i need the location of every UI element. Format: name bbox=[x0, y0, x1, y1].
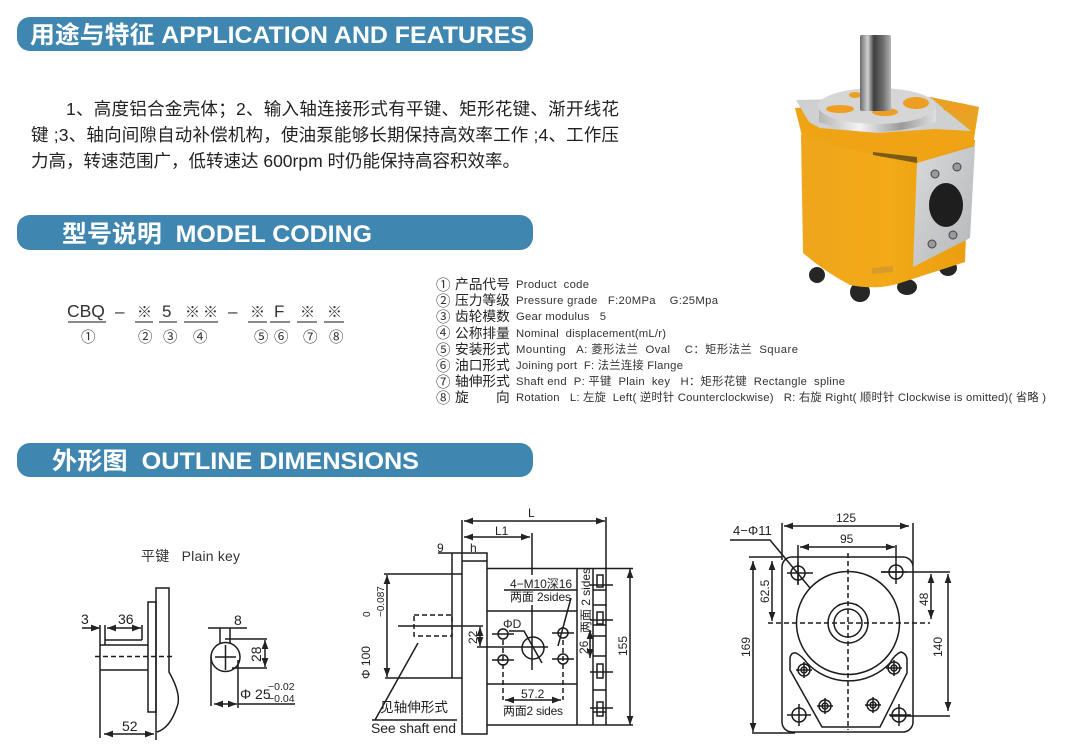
legend: model code explanation: ⑥ bbox=[436, 358, 450, 375]
diagram: shaft cross section: 28 bbox=[248, 646, 264, 662]
diagram: shaft cross section: −0.04 bbox=[268, 693, 295, 705]
diagram: side view: 26 bbox=[577, 640, 591, 654]
model code diagram: ⑦ bbox=[303, 329, 318, 346]
model code diagram: ※ bbox=[203, 304, 218, 321]
pump side panel bbox=[913, 146, 975, 267]
diagram: front view: 48 bbox=[917, 592, 931, 606]
legend: model code explanation: 产品代号 bbox=[455, 277, 510, 292]
diagram: side view: 57.2 bbox=[521, 687, 545, 701]
legend: model code explanation: Product code bbox=[516, 279, 589, 291]
legend: model code explanation: 压力等级 bbox=[455, 292, 510, 308]
diagram: shaft cross section: Φ 25 bbox=[240, 686, 271, 702]
legend: model code explanation: ③ bbox=[436, 309, 450, 326]
diagram: side view: h bbox=[470, 541, 477, 555]
diagram: side view: −0.087 bbox=[376, 586, 387, 617]
diagram: shaft cross section bbox=[208, 612, 295, 708]
legend: model code explanation: Gear modulus 5 bbox=[516, 311, 606, 323]
diagram: side view: L bbox=[528, 506, 535, 520]
legend: model code explanation: Nominal displacement(mL/r) bbox=[516, 328, 666, 340]
model code diagram: ④ bbox=[193, 329, 208, 346]
legend: model code explanation bbox=[436, 277, 1046, 407]
diagram: side view: Φ 100 bbox=[359, 646, 373, 679]
model code diagram: – bbox=[228, 302, 238, 321]
model code diagram: ※ bbox=[250, 304, 265, 321]
diagram: side view: 两面 2 sides bbox=[579, 568, 593, 633]
legend: model code explanation: 公称排量 bbox=[455, 326, 510, 341]
banner: outline dimensions bbox=[17, 443, 533, 477]
pump screws bbox=[928, 163, 961, 248]
pump flange ring bbox=[819, 106, 936, 132]
diagram: side view: L1 bbox=[495, 524, 509, 538]
diagram: side view: 9 bbox=[437, 541, 444, 555]
diagram: shaft cross section: 8 bbox=[234, 612, 242, 628]
diagram: front view: 125 bbox=[836, 511, 856, 525]
diagram: side view: 22 bbox=[466, 630, 480, 644]
diagram: plain key shaft end bbox=[81, 548, 240, 740]
label: plain key: 平键 Plain key bbox=[141, 548, 240, 564]
legend: model code explanation: ① bbox=[436, 277, 450, 294]
legend: model code explanation: 旋 bbox=[455, 390, 469, 405]
model code diagram: ⑧ bbox=[329, 329, 344, 346]
legend: model code explanation: ④ bbox=[436, 325, 450, 342]
diagram: side view: 见轴伸形式 bbox=[380, 700, 448, 715]
model code diagram: ※ bbox=[137, 304, 152, 321]
model code diagram bbox=[67, 301, 344, 346]
pump port bbox=[929, 183, 963, 227]
model code diagram: F bbox=[274, 302, 284, 321]
diagram: front view: 4−Φ11 bbox=[733, 523, 772, 538]
legend: model code explanation: 向 bbox=[496, 390, 510, 405]
legend: model code explanation: 安装形式 bbox=[455, 342, 510, 357]
diagram: side view: ΦD bbox=[503, 617, 522, 631]
model code diagram: ① bbox=[81, 329, 96, 346]
model code diagram: ※ bbox=[327, 304, 342, 321]
pump top right corner bbox=[930, 97, 979, 131]
banner: model coding: 型号说明 MODEL CODING bbox=[62, 221, 372, 248]
legend: model code explanation: 齿轮模数 bbox=[455, 309, 510, 324]
pump top oil ports bbox=[826, 92, 971, 116]
banner: application and features: 用途与特征 APPLICATION AND FEATURES bbox=[30, 21, 527, 49]
legend: model code explanation: Pressure grade F:20MPa G:25Mpa bbox=[516, 295, 719, 307]
diagram: shaft cross section: −0.02 bbox=[268, 681, 295, 693]
legend: model code explanation: ⑦ bbox=[436, 374, 450, 391]
text block: features description: 键 ;3、轴向间隙自动补偿机构，使油泵能够长期保持高效率工作 ;4、工作压 bbox=[31, 125, 619, 145]
pump seam highlight bbox=[872, 266, 893, 274]
legend: model code explanation: ⑤ bbox=[436, 342, 450, 359]
legend: model code explanation: 轴伸形式 bbox=[455, 374, 510, 389]
diagram: plain key shaft end: 36 bbox=[118, 611, 134, 627]
pump shaft bbox=[860, 35, 891, 111]
pump body shadow line bbox=[873, 152, 917, 163]
legend: model code explanation: Shaft end P: 平键 Plain key H：矩形花键 Rectangle spline bbox=[516, 374, 845, 388]
pump feet bbox=[809, 260, 957, 302]
model code diagram: ③ bbox=[163, 329, 178, 346]
model code diagram: ② bbox=[138, 329, 152, 346]
photo: yellow gear pump bbox=[795, 35, 979, 302]
diagram: front view: 140 bbox=[931, 637, 945, 657]
legend: model code explanation: ② bbox=[436, 293, 450, 310]
diagram: side view bbox=[359, 506, 633, 736]
text block: features description: 1、高度铝合金壳体；2、输入轴连接形式有平键、矩形花键、渐开线花 bbox=[66, 99, 619, 119]
diagram: side view: 155 bbox=[616, 636, 630, 656]
pump body bbox=[801, 135, 975, 287]
model code diagram: ⑥ bbox=[274, 329, 288, 346]
legend: model code explanation: 油口形式 bbox=[455, 358, 510, 373]
model code diagram: ※ bbox=[300, 304, 315, 321]
diagram: plain key shaft end: 3 bbox=[81, 611, 89, 627]
legend: model code explanation: Joining port F: 法兰连接 Flange bbox=[516, 358, 683, 372]
model code diagram: ⑤ bbox=[254, 329, 268, 346]
diagram: front view: 95 bbox=[840, 532, 854, 546]
legend: model code explanation: ⑧ bbox=[436, 390, 450, 407]
pump rim bbox=[795, 97, 979, 160]
legend: model code explanation: Rotation L: 左旋 Left( 逆时针 Counterclockwise) R: 右旋 Right( 顺时针 Clockwise is omitted)( 省略 ) bbox=[516, 390, 1046, 404]
diagram: front view: 169 bbox=[739, 637, 753, 657]
model code diagram: ※ bbox=[185, 304, 200, 321]
model code diagram: CBQ bbox=[67, 301, 105, 321]
text block: features description: 力高，转速范围广，低转速达 600rpm 时仍能保持高容积效率。 bbox=[31, 151, 520, 171]
model code diagram: – bbox=[115, 302, 125, 321]
banner: outline dimensions: 外形图 OUTLINE DIMENSIONS bbox=[52, 448, 419, 475]
diagram: side view: 0 bbox=[362, 611, 373, 617]
diagram: side view: 4−M10深16 bbox=[510, 577, 572, 591]
banner: model coding bbox=[17, 215, 533, 250]
diagram: side view: 两面 2sides bbox=[510, 590, 571, 604]
diagram: side view: 两面2 sides bbox=[503, 704, 563, 718]
diagram: front view bbox=[730, 511, 950, 733]
pump top plate bbox=[796, 97, 971, 133]
diagram: plain key shaft end: 52 bbox=[122, 718, 138, 734]
diagram: front view: 62.5 bbox=[758, 579, 772, 603]
diagram: side view: See shaft end bbox=[371, 720, 456, 736]
model code diagram: 5 bbox=[162, 302, 171, 321]
text block: features description bbox=[31, 99, 619, 171]
legend: model code explanation: Mounting A: 菱形法兰 Oval C：矩形法兰 Square bbox=[516, 342, 798, 356]
